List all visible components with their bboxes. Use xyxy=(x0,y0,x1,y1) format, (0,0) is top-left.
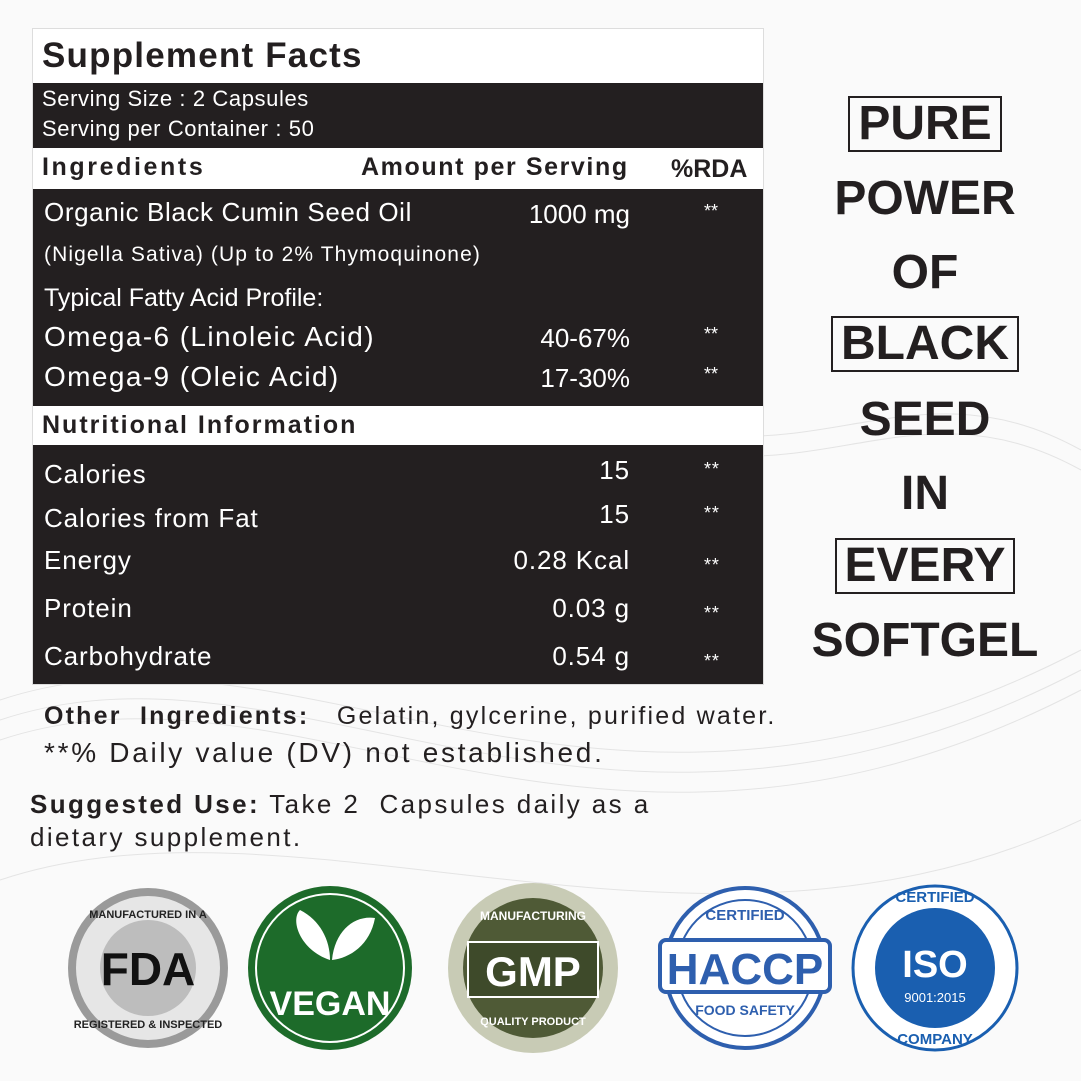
ingredients header xyxy=(42,153,747,183)
badge: HACCP: FOOD SAFETY xyxy=(695,1002,795,1018)
badge: HACCP xyxy=(660,888,830,1048)
ingredients header: %RDA xyxy=(671,155,747,183)
nutrition rows xyxy=(33,445,763,684)
ingredients rows xyxy=(33,189,763,406)
badge: GMP: GMP xyxy=(485,948,581,995)
badge: ISO: CERTIFIED xyxy=(895,889,975,906)
badge: ISO xyxy=(853,886,1017,1050)
ingredients rows: 40-67% xyxy=(540,323,630,353)
nutritional header: Nutritional Information xyxy=(42,411,357,439)
nutrition rows: ** xyxy=(704,459,720,479)
badge: GMP xyxy=(448,883,618,1053)
nutrition rows: Energy xyxy=(44,545,132,575)
badge: HACCP: CERTIFIED xyxy=(705,907,785,924)
nutrition rows: ** xyxy=(704,503,720,523)
nutrition rows: 15 xyxy=(599,455,630,485)
badge: VEGAN: VEGAN xyxy=(270,985,390,1023)
nutrition rows: 0.28 Kcal xyxy=(513,545,630,575)
tagline: IN xyxy=(901,467,949,520)
certification badges xyxy=(68,883,1018,1053)
badge: GMP: QUALITY PRODUCT xyxy=(480,1016,586,1028)
dv note: **% Daily value (DV) not established. xyxy=(44,737,605,768)
suggested use: dietary supplement. xyxy=(30,822,303,852)
ingredients rows: ** xyxy=(704,324,718,344)
nutrition rows: Calories from Fat xyxy=(44,503,259,533)
badge: ISO: COMPANY xyxy=(897,1031,973,1048)
tagline: PURE xyxy=(858,97,992,150)
ingredients rows: Organic Black Cumin Seed Oil xyxy=(44,197,412,227)
badge: FDA: REGISTERED & INSPECTED xyxy=(74,1019,222,1031)
serving band xyxy=(33,83,763,148)
ingredients rows: Omega-9 (Oleic Acid) xyxy=(44,361,340,392)
suggested use: Suggested Use: Take 2 Capsules daily as a xyxy=(30,789,651,819)
badge: FDA: MANUFACTURED IN A xyxy=(89,909,207,921)
badge: ISO: ISO xyxy=(902,944,968,986)
supplement facts table xyxy=(32,28,764,685)
other ingredients: Other Ingredients: Gelatin, gylcerine, purified water. xyxy=(44,702,777,730)
nutrition rows: Protein xyxy=(44,593,133,623)
tagline: SOFTGEL xyxy=(812,614,1038,667)
nutrition rows: Carbohydrate xyxy=(44,641,212,671)
nutrition rows: Calories xyxy=(44,459,147,489)
badge: ISO: 9001:2015 xyxy=(904,990,966,1005)
tagline xyxy=(812,96,1038,667)
tagline: BLACK xyxy=(841,317,1009,370)
badge: FDA: FDA xyxy=(101,943,195,995)
badge: VEGAN xyxy=(248,886,412,1050)
tagline: OF xyxy=(892,246,958,299)
tagline: POWER xyxy=(834,172,1016,225)
nutrition rows: 0.54 g xyxy=(552,641,630,671)
serving band: Serving Size : 2 Capsules xyxy=(42,86,309,111)
nutrition rows: ** xyxy=(704,603,720,623)
ingredients rows: 1000 mg xyxy=(529,199,630,229)
ingredients rows: 17-30% xyxy=(540,363,630,393)
tagline: SEED xyxy=(860,393,990,446)
ingredients header: Ingredients xyxy=(42,153,205,181)
suggested use xyxy=(30,789,651,852)
nutrition rows: ** xyxy=(704,555,720,575)
title: Supplement Facts xyxy=(42,36,363,75)
nutrition rows: ** xyxy=(704,651,720,671)
ingredients rows: Omega-6 (Linoleic Acid) xyxy=(44,321,375,352)
tagline: EVERY xyxy=(845,539,1005,592)
badge: GMP: MANUFACTURING xyxy=(480,909,586,923)
badge: HACCP: HACCP xyxy=(667,945,823,994)
nutrition rows: 0.03 g xyxy=(552,593,630,623)
ingredients rows: ** xyxy=(704,364,718,384)
ingredients rows: Typical Fatty Acid Profile: xyxy=(44,284,323,312)
ingredients rows: (Nigella Sativa) (Up to 2% Thymoquinone) xyxy=(44,243,481,266)
nutrition rows: 15 xyxy=(599,499,630,529)
ingredients rows: ** xyxy=(704,201,718,221)
badge: FDA xyxy=(68,888,228,1048)
ingredients header: Amount per Serving xyxy=(361,153,629,181)
serving band: Serving per Container : 50 xyxy=(42,116,314,141)
